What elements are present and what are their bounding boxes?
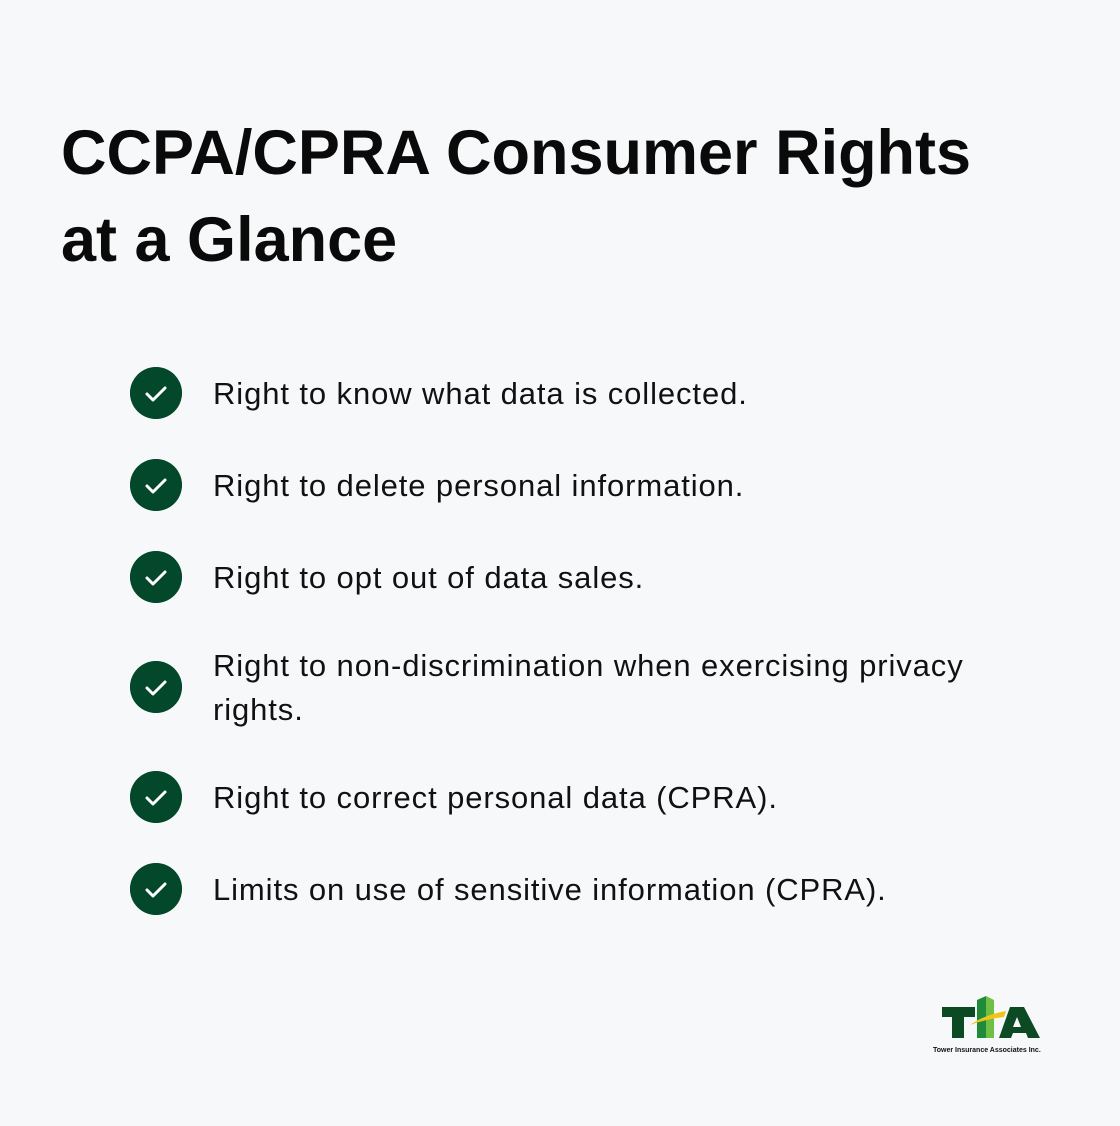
icon: check <box>130 863 182 915</box>
item 3 <box>130 551 644 603</box>
item 6: Limits on use of sensitive information (CPRA). <box>213 872 887 907</box>
item 2: Right to delete personal information. <box>213 468 744 503</box>
item 2 <box>130 459 744 511</box>
title: at a Glance <box>61 205 397 275</box>
icon: check <box>130 551 182 603</box>
item 4: rights. <box>213 692 304 727</box>
icon: check <box>130 661 182 713</box>
item 3: Right to opt out of data sales. <box>213 560 644 595</box>
icon: check <box>130 367 182 419</box>
item 5 <box>130 771 778 823</box>
item 5: Right to correct personal data (CPRA). <box>213 780 778 815</box>
title <box>61 118 971 275</box>
item 1 <box>130 367 748 419</box>
item 4 <box>130 648 964 727</box>
logo <box>933 996 1041 1054</box>
item 6 <box>130 863 887 915</box>
icon: check <box>130 771 182 823</box>
item 1: Right to know what data is collected. <box>213 376 748 411</box>
item 4: Right to non-discrimination when exercising privacy <box>213 648 964 683</box>
title: CCPA/CPRA Consumer Rights <box>61 118 971 188</box>
icon: check <box>130 459 182 511</box>
logo: Tower Insurance Associates Inc. <box>933 1047 1041 1054</box>
